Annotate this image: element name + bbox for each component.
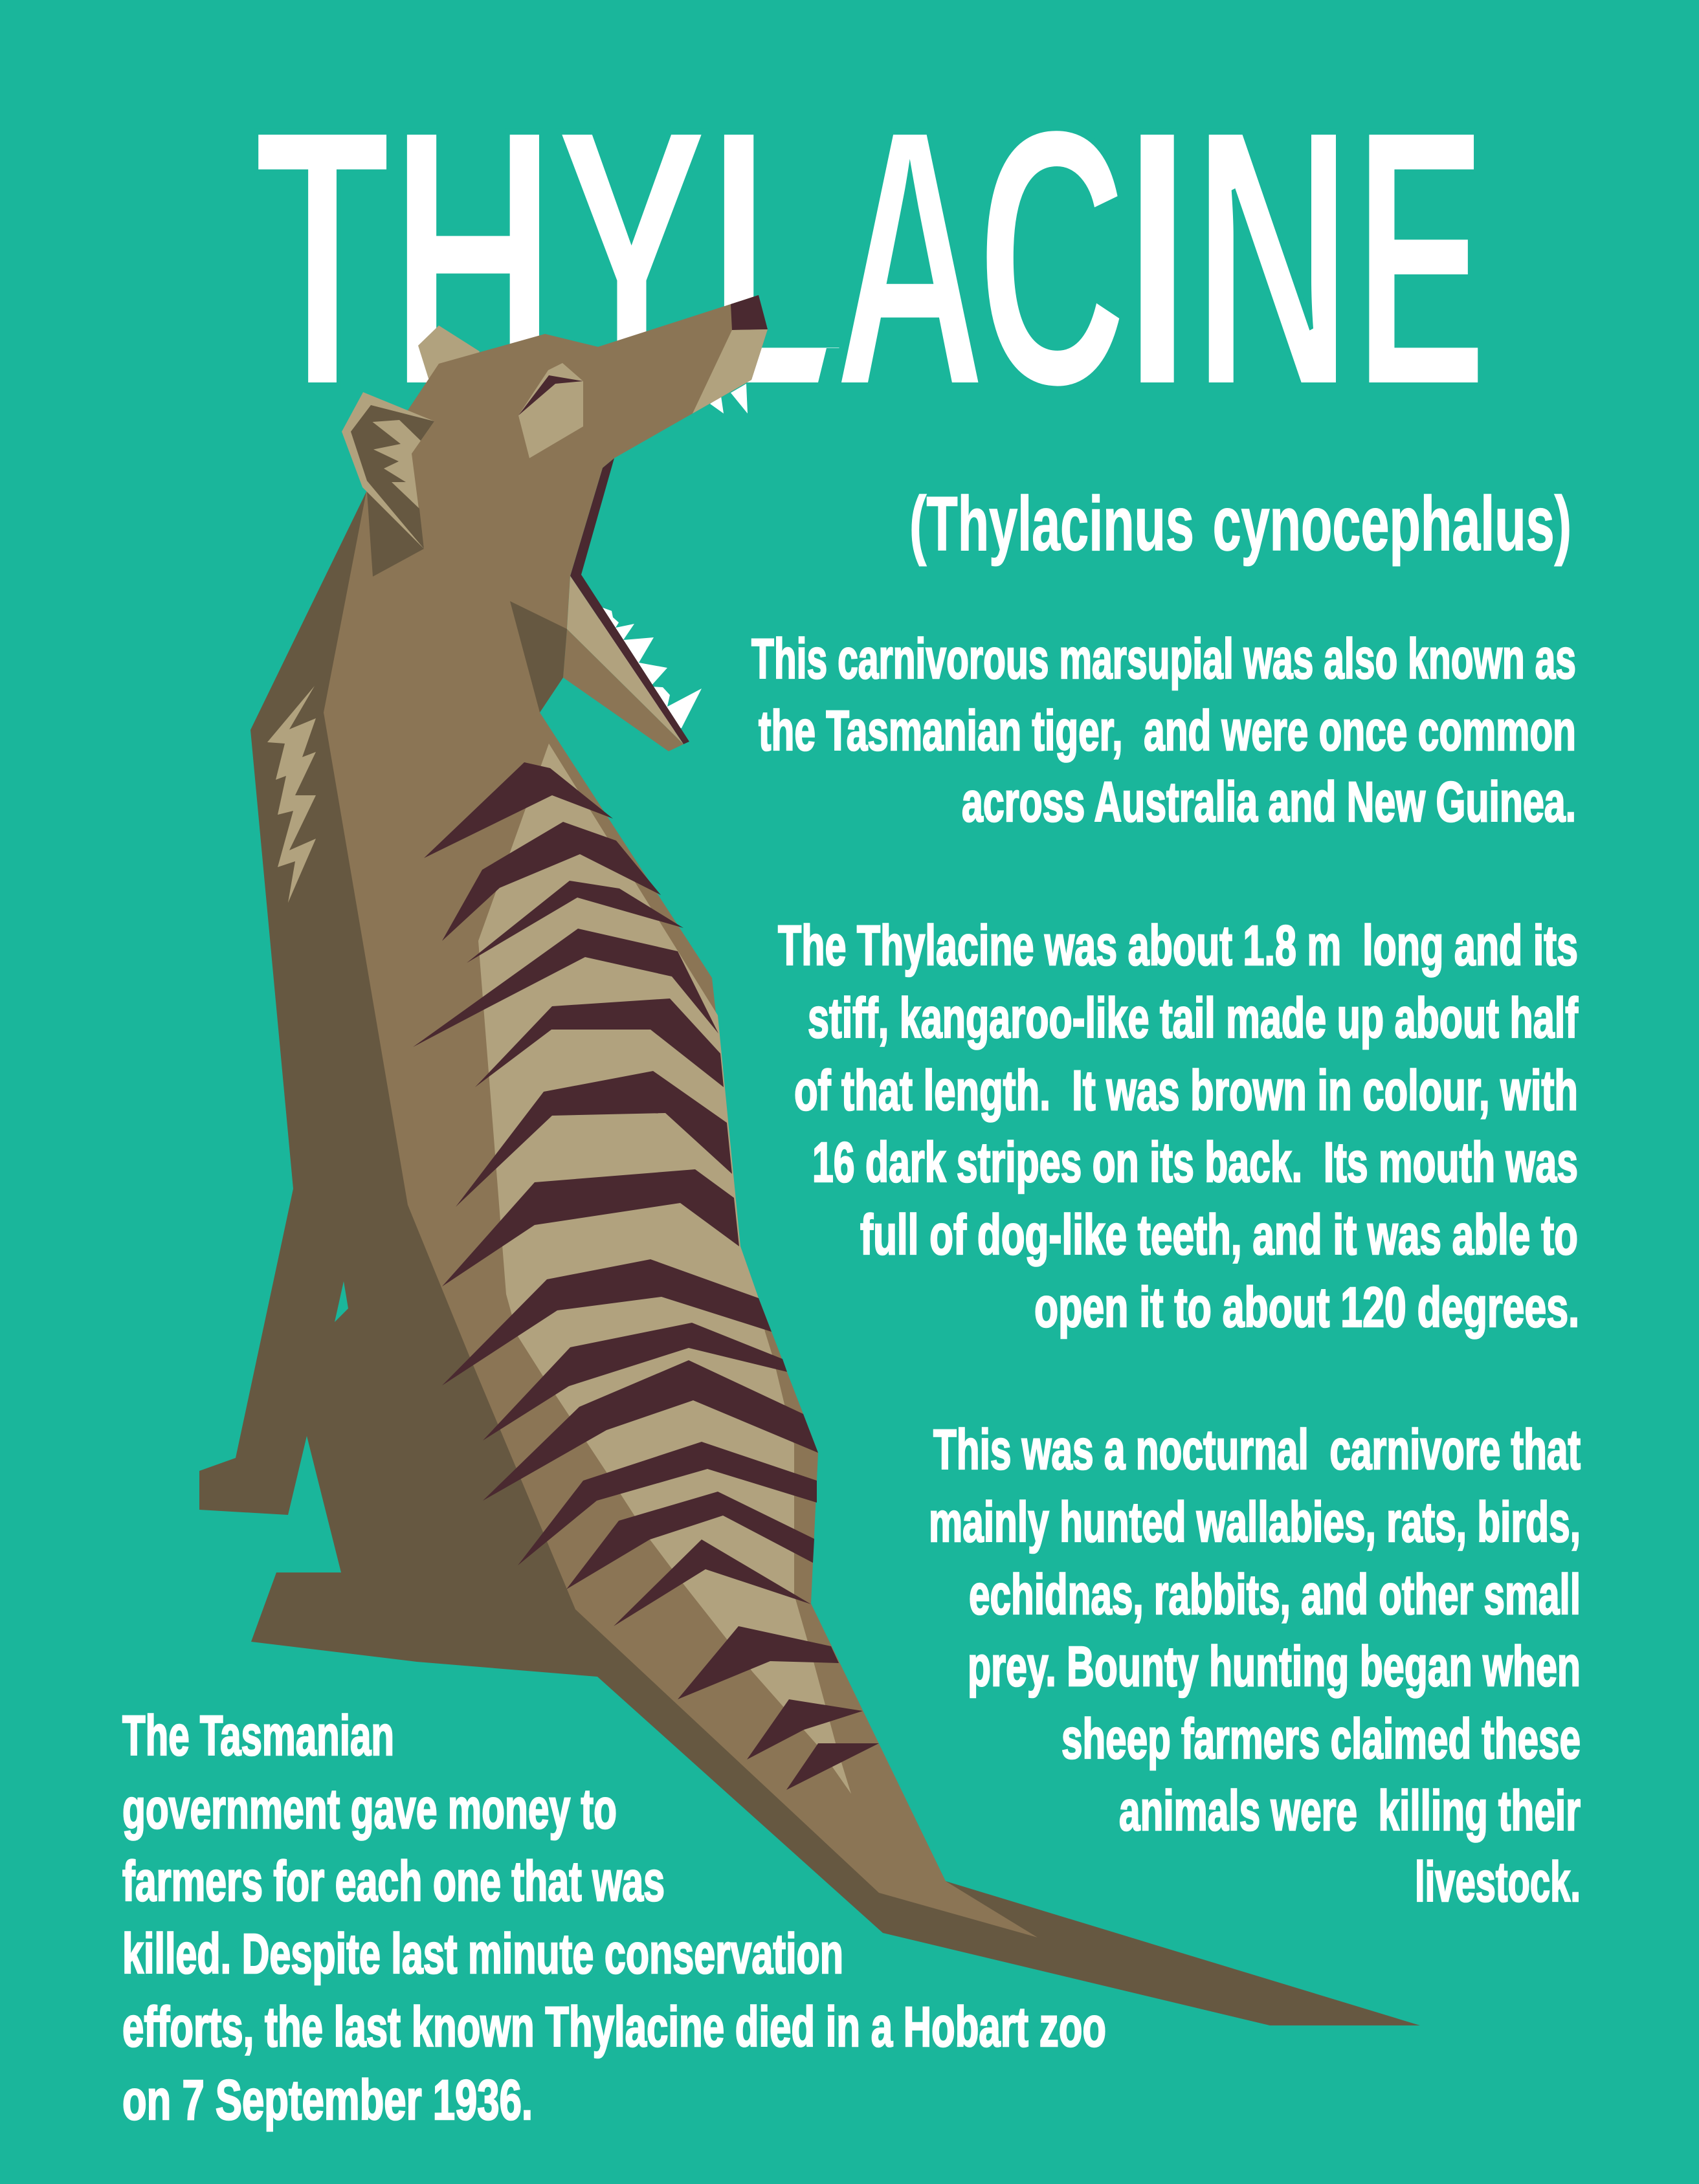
head and body <box>324 295 1038 1937</box>
title: A <box>834 52 986 465</box>
title: C <box>976 52 1127 465</box>
title: L <box>707 52 849 465</box>
stripes <box>413 762 879 1790</box>
text block: extinction: farmers for each one that was <box>122 1850 665 1913</box>
text block: diet and bounty hunting <box>929 1418 1581 1914</box>
nose <box>731 295 768 330</box>
title: Y <box>555 52 709 465</box>
body shadow, legs and tail <box>199 492 1420 2025</box>
text block: extinction <box>122 1704 1106 2132</box>
snout <box>693 329 768 414</box>
title: H <box>390 52 557 465</box>
mouth lining <box>570 458 689 744</box>
light back panel <box>478 744 851 1794</box>
title: N <box>1192 52 1353 465</box>
icon: eye <box>518 363 583 458</box>
icon: lower teeth <box>599 608 702 731</box>
text block: extinction: efforts, the last known Thylacine died in a Hobart zoo <box>122 1996 1106 2058</box>
text block: extinction: The Tasmanian <box>122 1704 394 1767</box>
icon: upper teeth <box>710 384 748 414</box>
title: T <box>254 52 391 465</box>
text block: description <box>778 914 1579 1339</box>
text block: extinction: killed. Despite last minute conservation <box>122 1923 843 1985</box>
title: I <box>1121 52 1194 465</box>
text block: extinction: government gave money to <box>122 1778 617 1840</box>
neck shadow <box>510 601 567 712</box>
title: E <box>1354 52 1487 465</box>
text block: intro <box>751 628 1576 833</box>
near ear <box>342 392 434 577</box>
lower jaw <box>563 576 683 751</box>
gap between the legs <box>335 1281 348 1322</box>
text block: diet and bounty hunting: livestock. <box>1415 1851 1581 1914</box>
far ear <box>418 325 480 388</box>
text block: extinction: on 7 September 1936. <box>122 2069 533 2132</box>
illustration: thylacine <box>199 295 1420 2025</box>
shoulder fur mark <box>267 686 316 903</box>
